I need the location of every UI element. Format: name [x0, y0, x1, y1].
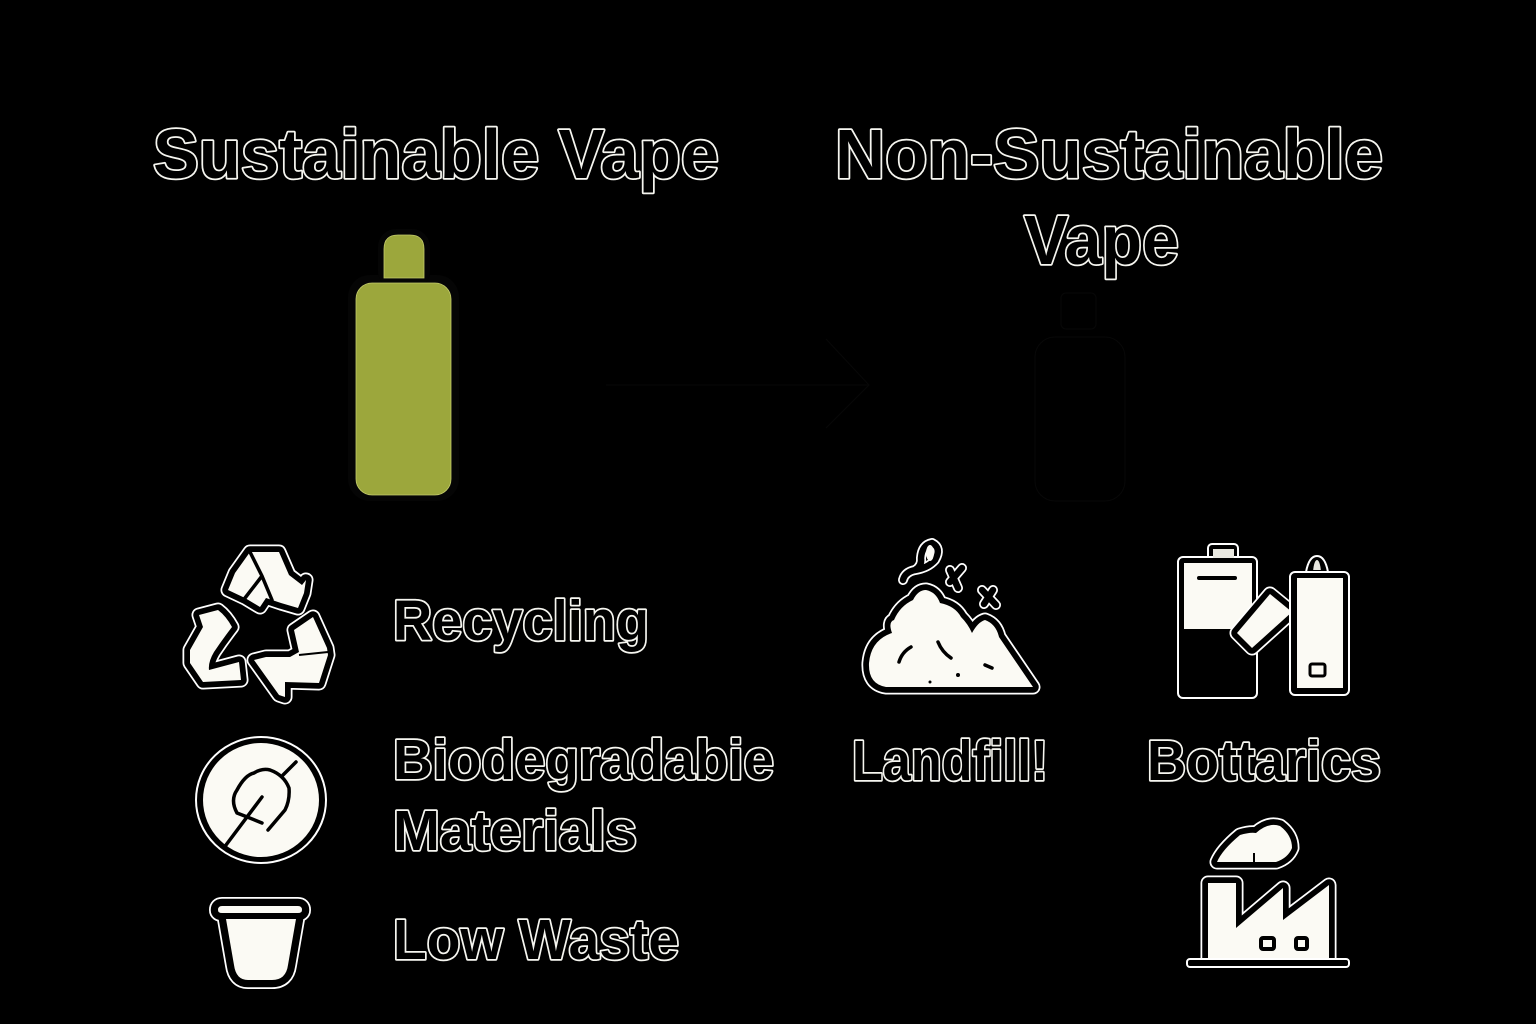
arrow: faint arrow between vapes	[606, 339, 869, 428]
title: Non-Sustainable Vape	[835, 115, 1383, 279]
icon: batteries	[1178, 544, 1349, 698]
icon: factory with smoke cloud	[1187, 825, 1349, 967]
icon: black non-sustainable vape bottle	[1035, 293, 1125, 501]
label: Biodegradable Materials: Materials	[393, 799, 637, 863]
label: Batteries: Bottarics	[1147, 729, 1381, 793]
icon: low waste cup	[218, 906, 302, 980]
label: Biodegradable Materials	[393, 728, 774, 863]
icon: recycling symbol	[190, 552, 328, 697]
title: Non-Sustainable Vape: Non-Sustainable	[835, 115, 1383, 193]
label: Landfill: Landfill!	[852, 729, 1048, 793]
icon: biodegradable leaf in circle	[196, 737, 326, 863]
icon: green sustainable vape bottle	[348, 229, 459, 501]
label: Biodegradable Materials: Biodegradabie	[393, 728, 774, 792]
icon: landfill mound	[869, 543, 1033, 687]
title: Sustainable Vape: Sustainable Vape	[153, 115, 719, 193]
label: Recycling: Recycling	[393, 589, 649, 653]
label: Low Waste: Low Waste	[393, 908, 679, 972]
title: Non-Sustainable Vape: Vape	[1024, 201, 1179, 279]
